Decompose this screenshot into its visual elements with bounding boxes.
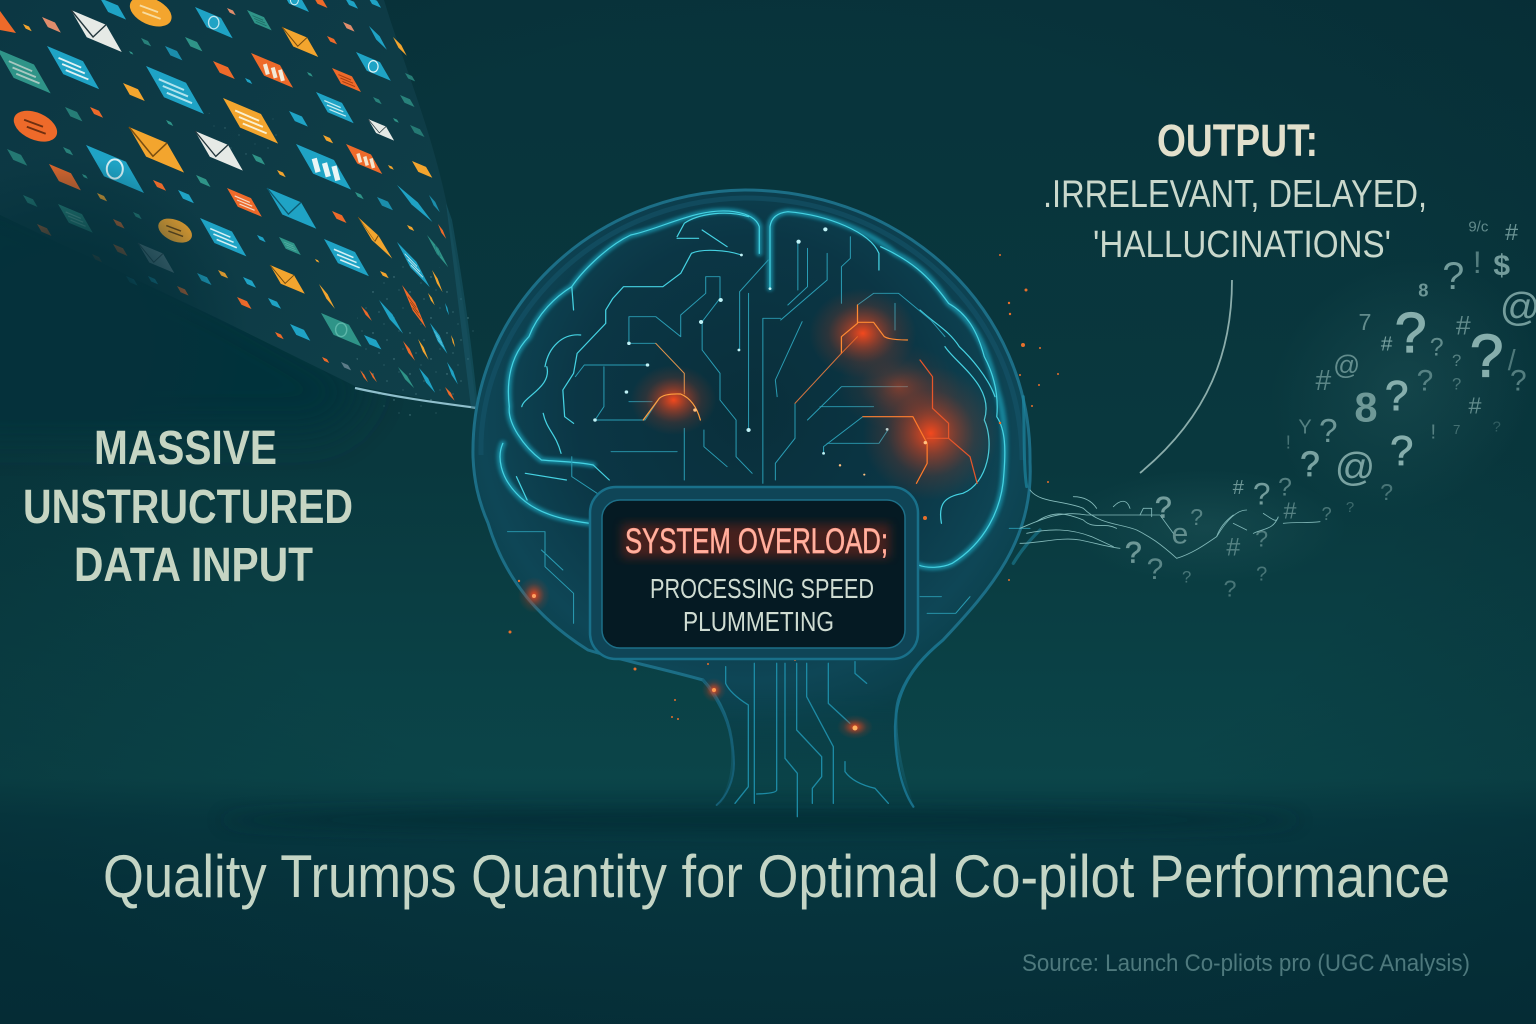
scattered symbols: ! xyxy=(1286,431,1291,452)
glow contour xyxy=(500,211,1005,567)
scattered symbols: 7 xyxy=(1359,309,1371,335)
scattered symbols: @ xyxy=(1333,350,1360,380)
scattered symbols: # xyxy=(1315,365,1331,397)
neck circuit lines xyxy=(703,640,943,817)
scattered symbols: ? xyxy=(1155,491,1172,524)
scattered symbols: 8 xyxy=(1418,280,1428,301)
scattered symbols: ? xyxy=(1300,445,1320,484)
scattered symbols: # xyxy=(1284,497,1297,523)
scattered symbols: ? xyxy=(1322,503,1332,524)
callout line xyxy=(1140,280,1232,473)
label: output: 'HALLUCINATIONS' xyxy=(1093,224,1391,266)
label: output: OUTPUT: xyxy=(1157,115,1318,166)
label: output: .IRRELEVANT, DELAYED, xyxy=(1043,173,1427,216)
scattered symbols: ? xyxy=(1492,419,1501,436)
data sheet with scattered message icons xyxy=(0,0,478,420)
brain neural circuits xyxy=(500,211,1030,623)
scattered symbols: $ xyxy=(1493,250,1510,283)
label: data input xyxy=(23,422,353,592)
scattered symbols: ? xyxy=(1278,474,1292,502)
scattered symbols: ? xyxy=(1390,427,1413,474)
scattered symbols: ? xyxy=(1190,504,1203,530)
label: data input: MASSIVE xyxy=(94,422,277,475)
panel text xyxy=(650,573,874,637)
nodes hot xyxy=(693,408,927,476)
icons xyxy=(0,0,458,401)
scattered symbols: / xyxy=(1508,345,1516,377)
scattered symbols: ! xyxy=(1431,421,1436,443)
scattered symbols: # xyxy=(1456,311,1471,341)
scattered symbols xyxy=(1067,208,1536,602)
scattered symbols: # xyxy=(1233,477,1245,499)
scattered symbols: ? xyxy=(1224,576,1237,602)
neural nodes xyxy=(593,227,889,455)
ember sparks xyxy=(508,254,1059,739)
scattered symbols: ? xyxy=(1125,536,1142,569)
scattered symbols: ! xyxy=(1473,244,1482,280)
label: output xyxy=(1043,115,1427,266)
scattered symbols: ? xyxy=(1510,365,1527,398)
label: data input: UNSTRUCTURED xyxy=(23,481,353,534)
scattered symbols: ? xyxy=(1256,563,1267,585)
panel text: PLUMMETING xyxy=(683,606,834,637)
bright contour xyxy=(500,211,1005,567)
overload traces xyxy=(643,305,977,483)
panel heading: SYSTEM OVERLOAD; xyxy=(625,522,888,561)
scattered symbols: 8 xyxy=(1354,384,1378,431)
scattered symbols: # xyxy=(1381,333,1393,356)
scattered symbols: ? xyxy=(1385,372,1408,419)
scattered symbols: 9/c xyxy=(1468,219,1489,236)
scattered symbols: ? xyxy=(1470,323,1503,390)
brain head silhouette xyxy=(473,190,1030,807)
scattered symbols: ? xyxy=(1182,568,1191,587)
scattered symbols: e xyxy=(1172,517,1188,550)
scattered symbols: ? xyxy=(1417,365,1433,398)
output strands from the brain xyxy=(1013,397,1320,563)
scattered symbols: ? xyxy=(1442,254,1464,298)
scattered symbols: 7 xyxy=(1453,422,1460,437)
scattered symbols: # xyxy=(1505,219,1518,245)
overload hotspots xyxy=(631,288,999,500)
label: data input: DATA INPUT xyxy=(74,539,313,592)
scattered symbols: ? xyxy=(1255,526,1268,552)
scattered symbols: # xyxy=(1469,392,1482,418)
scattered symbols: ? xyxy=(1380,479,1393,505)
source note: Source: Launch Co-pliots pro (UGC Analysis) xyxy=(1022,950,1470,977)
scattered symbols: ? xyxy=(1452,351,1461,370)
scattered symbols: # xyxy=(1226,533,1240,561)
scattered symbols: @ xyxy=(1335,446,1375,490)
scattered symbols: ? xyxy=(1319,413,1338,450)
scattered symbols: ? xyxy=(1147,553,1163,586)
callout: system overload panel xyxy=(590,487,918,659)
scattered symbols: ? xyxy=(1395,302,1426,365)
scattered symbols: ? xyxy=(1346,499,1354,516)
scattered symbols: Y xyxy=(1298,416,1312,438)
circuit traces xyxy=(507,237,1030,623)
scattered symbols: ? xyxy=(1253,476,1270,512)
panel text: PROCESSING SPEED xyxy=(650,573,874,604)
scattered symbols: ? xyxy=(1430,334,1444,362)
scattered symbols: ? xyxy=(1452,374,1461,393)
